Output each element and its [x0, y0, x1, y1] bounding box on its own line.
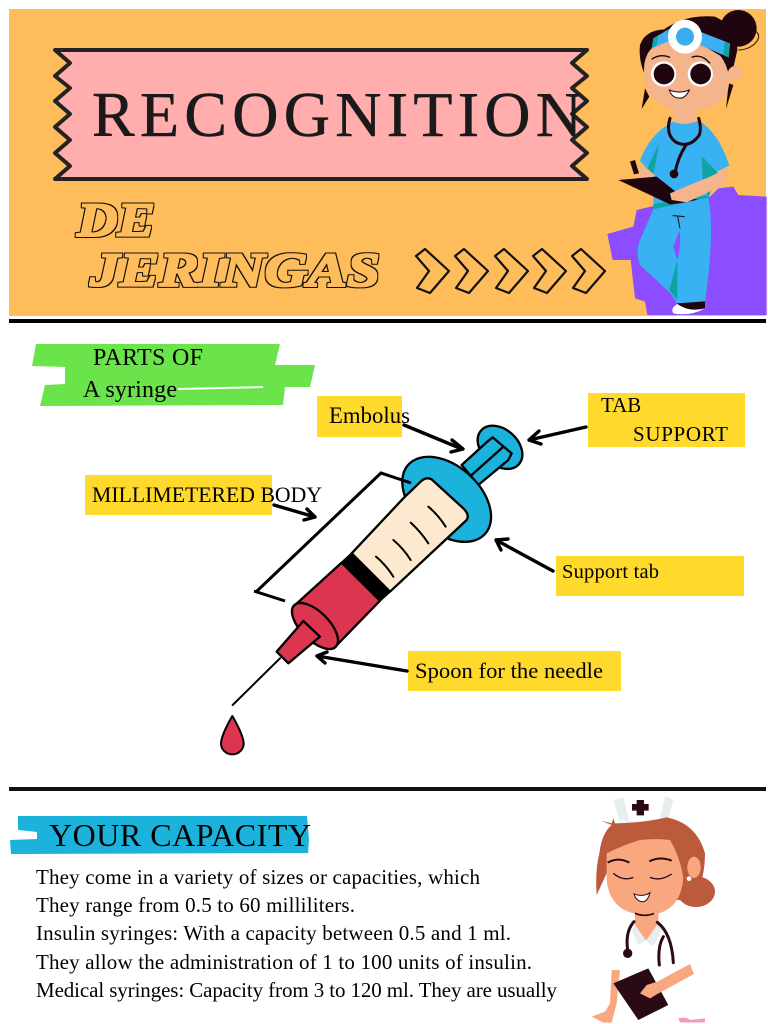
label: Millimetered body [85, 475, 322, 515]
divider: top [9, 319, 766, 323]
arrow: spoon for the needle [317, 652, 407, 671]
text block: capacity: They allow the administration of 1 to 100 units of insulin. [36, 950, 532, 974]
subtitle: JERINGAS: JERINGAS [89, 244, 380, 297]
bracket: millimetered body [254, 473, 411, 601]
arrow: embolus [404, 425, 463, 452]
text block: capacity: They come in a variety of sizes or capacities, which [36, 865, 480, 889]
illustration: nurse with clipboard [592, 797, 715, 1023]
label: Spoon for the needle [408, 651, 621, 691]
label: Millimetered body: MILLIMETERED BODY [92, 483, 322, 507]
text block: capacity: Medical syringes: Capacity from 3 to 120 ml. They are usually [36, 978, 558, 1002]
heading: parts of a syringe: PARTS OF [93, 345, 203, 371]
label: Support tab: Support tab [562, 561, 659, 583]
arrow: support tab [496, 539, 553, 571]
panel: header [9, 9, 767, 316]
icon: blood drop [221, 716, 244, 754]
text block: capacity [36, 865, 558, 1002]
label: TAB SUPPORT: TAB [601, 393, 641, 417]
label: Embolus: Embolus [329, 403, 410, 428]
heading: parts of a syringe [32, 344, 315, 406]
subtitle: DE: DE [76, 194, 155, 247]
label: Embolus [317, 396, 410, 437]
heading: your capacity: YOUR CAPACITY [49, 817, 311, 853]
title ribbon [55, 50, 587, 179]
divider: bottom [9, 787, 766, 791]
heading: parts of a syringe: A syringe [83, 377, 177, 403]
label: TAB SUPPORT [588, 393, 745, 447]
label: Spoon for the needle: Spoon for the needle [415, 658, 603, 683]
icon: chevrons [416, 249, 605, 293]
label: Support tab [556, 556, 744, 596]
illustration: syringe [221, 417, 531, 754]
text block: capacity: They range from 0.5 to 60 milliliters. [36, 893, 355, 917]
label: TAB SUPPORT: SUPPORT [633, 422, 728, 446]
title: RECOGNITION [92, 79, 582, 150]
arrow: tab support [529, 427, 586, 444]
arrow: millimetered body [274, 505, 315, 520]
text block: capacity: Insulin syringes: With a capacity between 0.5 and 1 ml. [36, 921, 511, 945]
illustration: doctor with clipboard [607, 10, 767, 315]
